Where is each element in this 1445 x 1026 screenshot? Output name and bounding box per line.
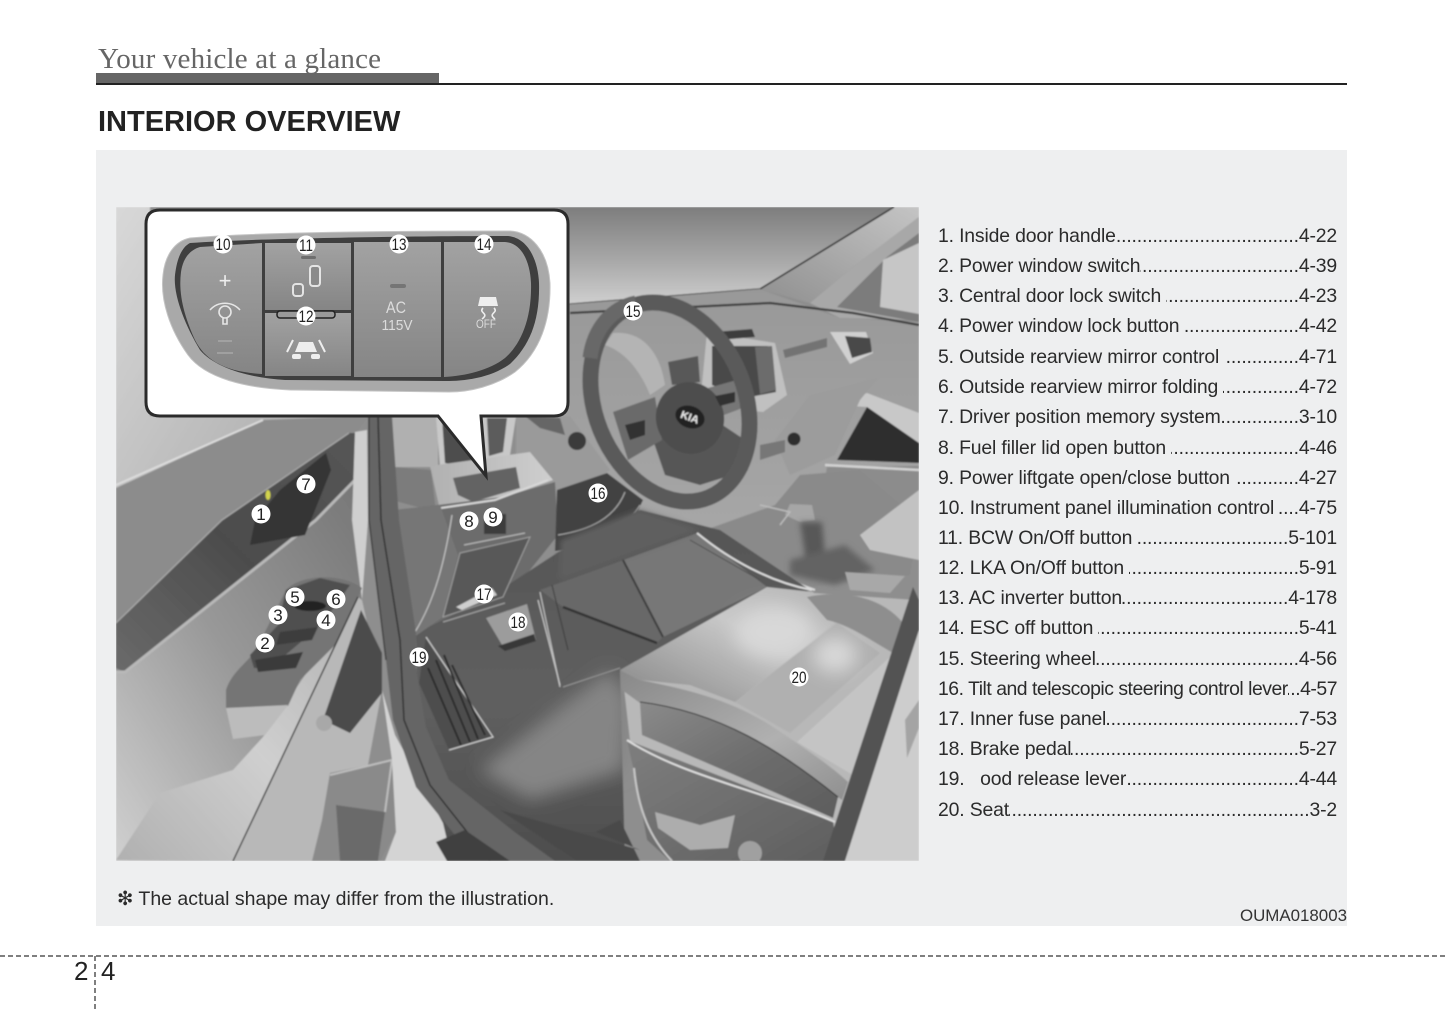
parts list: 3-2 (1309, 798, 1337, 820)
callout (146, 210, 568, 476)
parts list: 4-22 (1299, 224, 1337, 246)
scuff plate (419, 637, 493, 750)
parts list: 5. Outside rearview mirror control (938, 346, 1219, 368)
parts list: 4-71 (1299, 346, 1337, 368)
parts list: 17. Inner fuse panel (938, 708, 1106, 730)
marker 4: 4 (321, 611, 331, 630)
page number (74, 956, 115, 986)
shifter console (697, 470, 919, 587)
icon: ESC off: OFF (476, 317, 496, 331)
icon: blind-spot cars (293, 266, 320, 296)
header rule (96, 73, 1347, 85)
parts list: 4-46 (1299, 436, 1337, 458)
sill (368, 416, 555, 861)
button 11 (265, 243, 351, 310)
marker 17: 17 (476, 585, 492, 604)
parts list: 7. Driver position memory system (938, 406, 1221, 428)
parts list: 18. Brake pedal (938, 738, 1071, 760)
number markers (214, 234, 808, 687)
button 14 (444, 242, 531, 377)
marker 16: 16 (590, 484, 606, 503)
indicator light 11 (301, 256, 316, 259)
parts list: 6. Outside rearview mirror folding (938, 376, 1218, 398)
door panel top (116, 207, 370, 623)
steering wheel (562, 278, 778, 526)
parts list: 9. Power liftgate open/close button (938, 466, 1230, 488)
parts list: 4-178 (1288, 586, 1337, 608)
parts list: 7-53 (1299, 708, 1337, 730)
parts list: 4-23 (1299, 284, 1337, 306)
door panel main (116, 480, 362, 861)
marker 13: 13 (392, 235, 406, 254)
marker 7: 7 (301, 475, 311, 494)
switch bank (453, 467, 520, 502)
marker 11: 11 (299, 236, 313, 255)
marker 12: 12 (298, 307, 314, 326)
seat (620, 587, 919, 865)
parts list: 20. Seat (938, 798, 1009, 820)
page number: 4 (101, 956, 115, 986)
dash strip (783, 338, 827, 358)
floor mats (540, 510, 812, 687)
AC 115V label: 115V (382, 317, 412, 334)
marker 1: 1 (256, 505, 266, 524)
front panel (640, 703, 838, 818)
icon: brightness plus: + (219, 268, 231, 293)
icon: brightness minus (217, 341, 233, 353)
button 12 (265, 313, 351, 376)
button panel (162, 231, 550, 392)
marker 14: 14 (476, 235, 492, 254)
parts list: 11. BCW On/Off button (938, 526, 1132, 548)
marker 3 (268, 606, 288, 625)
lever panel (555, 473, 643, 553)
switch housing (430, 452, 553, 510)
parts list: 3. Central door lock switch (938, 284, 1161, 306)
illustration: vehicle interior (116, 207, 919, 861)
KIA badge: KIA (679, 409, 701, 427)
right cushion (797, 657, 890, 775)
area right of pillar (845, 630, 919, 861)
parts list: 4-72 (1299, 376, 1337, 398)
marker 20: 20 (792, 668, 806, 687)
left bolster (620, 587, 838, 702)
KIA badge (672, 402, 708, 432)
marker 9 (484, 508, 502, 527)
parts list: 4-39 (1299, 254, 1337, 276)
illustration note: ❇ The actual shape may differ from the illustration. (117, 888, 554, 910)
marker 8: 8 (464, 512, 474, 531)
marker 4 (316, 610, 336, 630)
kick panel (393, 505, 530, 640)
windshield (560, 207, 894, 305)
parts list: 5-41 (1299, 616, 1337, 638)
figure code: OUMA018003 (1240, 906, 1347, 925)
parts list: 16. Tilt and telescopic steering control lever (938, 678, 1288, 700)
soft-focus scene (116, 207, 919, 865)
page number: 2 (74, 956, 88, 986)
parts list: 5-101 (1288, 526, 1337, 548)
seat controls (655, 812, 735, 850)
icon: lane assist car (287, 340, 325, 359)
parts list: 4-56 (1299, 648, 1337, 670)
icon: ESC off (476, 297, 498, 331)
marker 2: 2 (260, 634, 270, 653)
floor (416, 510, 810, 861)
parts list: 12. LKA On/Off button (938, 556, 1124, 578)
floor highlight (480, 670, 630, 800)
door recess and handle (116, 430, 368, 672)
brake pedal (486, 600, 560, 685)
scene background (116, 207, 919, 861)
panel: interior overview (96, 150, 1347, 926)
steering hub (648, 374, 732, 462)
AC 115V label: AC (386, 298, 406, 317)
indicator light 13 (390, 284, 406, 288)
parts list: 10. Instrument panel illumination control (938, 496, 1274, 518)
marker 5: 5 (290, 588, 300, 607)
front roll (620, 670, 848, 800)
right vent (830, 332, 873, 364)
section title: INTERIOR OVERVIEW (98, 106, 400, 138)
marker 9: 9 (488, 508, 498, 527)
parts list: 15. Steering wheel (938, 648, 1096, 670)
B-pillar (823, 587, 919, 861)
chapter heading: Your vehicle at a glance (98, 43, 381, 75)
marker 19: 19 (412, 648, 426, 667)
parts list (938, 224, 1337, 820)
button 13 (354, 242, 441, 377)
door pocket (312, 760, 396, 861)
marker 10: 10 (216, 235, 230, 254)
dash knob (788, 432, 800, 446)
parts list: 4-57 (1300, 678, 1337, 700)
icon: illumination bulb (210, 303, 240, 324)
left instrument area (390, 416, 643, 640)
parts list: 4. Power window lock button (938, 314, 1179, 336)
marker 6: 6 (331, 590, 341, 609)
parts list: 5-27 (1299, 738, 1337, 760)
parts list: 4-27 (1299, 466, 1337, 488)
center stack (700, 332, 787, 412)
marker 8 (460, 512, 478, 531)
parts list: 3-10 (1299, 406, 1337, 428)
parts list: 4-75 (1299, 496, 1337, 518)
lower door panel (116, 597, 358, 861)
parts list: 14. ESC off button (938, 616, 1093, 638)
marker 3: 3 (273, 606, 283, 625)
parts list: 13. AC inverter button (938, 586, 1122, 608)
button 10 (180, 243, 262, 374)
armrest and window switches (226, 577, 362, 739)
parts list: 2. Power window switch (938, 254, 1140, 276)
marker 5 (286, 588, 304, 607)
door jamb (323, 610, 382, 733)
parts list: 8. Fuel filler lid open button (938, 436, 1166, 458)
parts list: 5-91 (1299, 556, 1337, 578)
marker 7 (296, 474, 316, 494)
marker 15: 15 (626, 302, 640, 321)
parts list: 1. Inside door handle (938, 224, 1116, 246)
glove box and right trim (835, 393, 919, 443)
right bolster (807, 594, 903, 653)
vent housing (390, 417, 438, 467)
parts list: 19. ood release lever (938, 768, 1126, 790)
door edge strip (233, 597, 382, 861)
seat base (622, 590, 919, 861)
lower trim (395, 482, 558, 640)
marker 18: 18 (510, 613, 526, 632)
marker 2 (256, 634, 274, 653)
A-pillar and side window (560, 207, 919, 322)
marker 1 (252, 504, 270, 524)
parts list: 4-44 (1299, 768, 1337, 790)
light sill (382, 690, 452, 861)
footer dashed rule (0, 955, 1445, 1009)
center insert (735, 623, 880, 733)
dashboard (540, 289, 919, 593)
marker 6 (326, 590, 346, 609)
AC 115V label (382, 298, 412, 334)
parts list: 4-42 (1299, 314, 1337, 336)
